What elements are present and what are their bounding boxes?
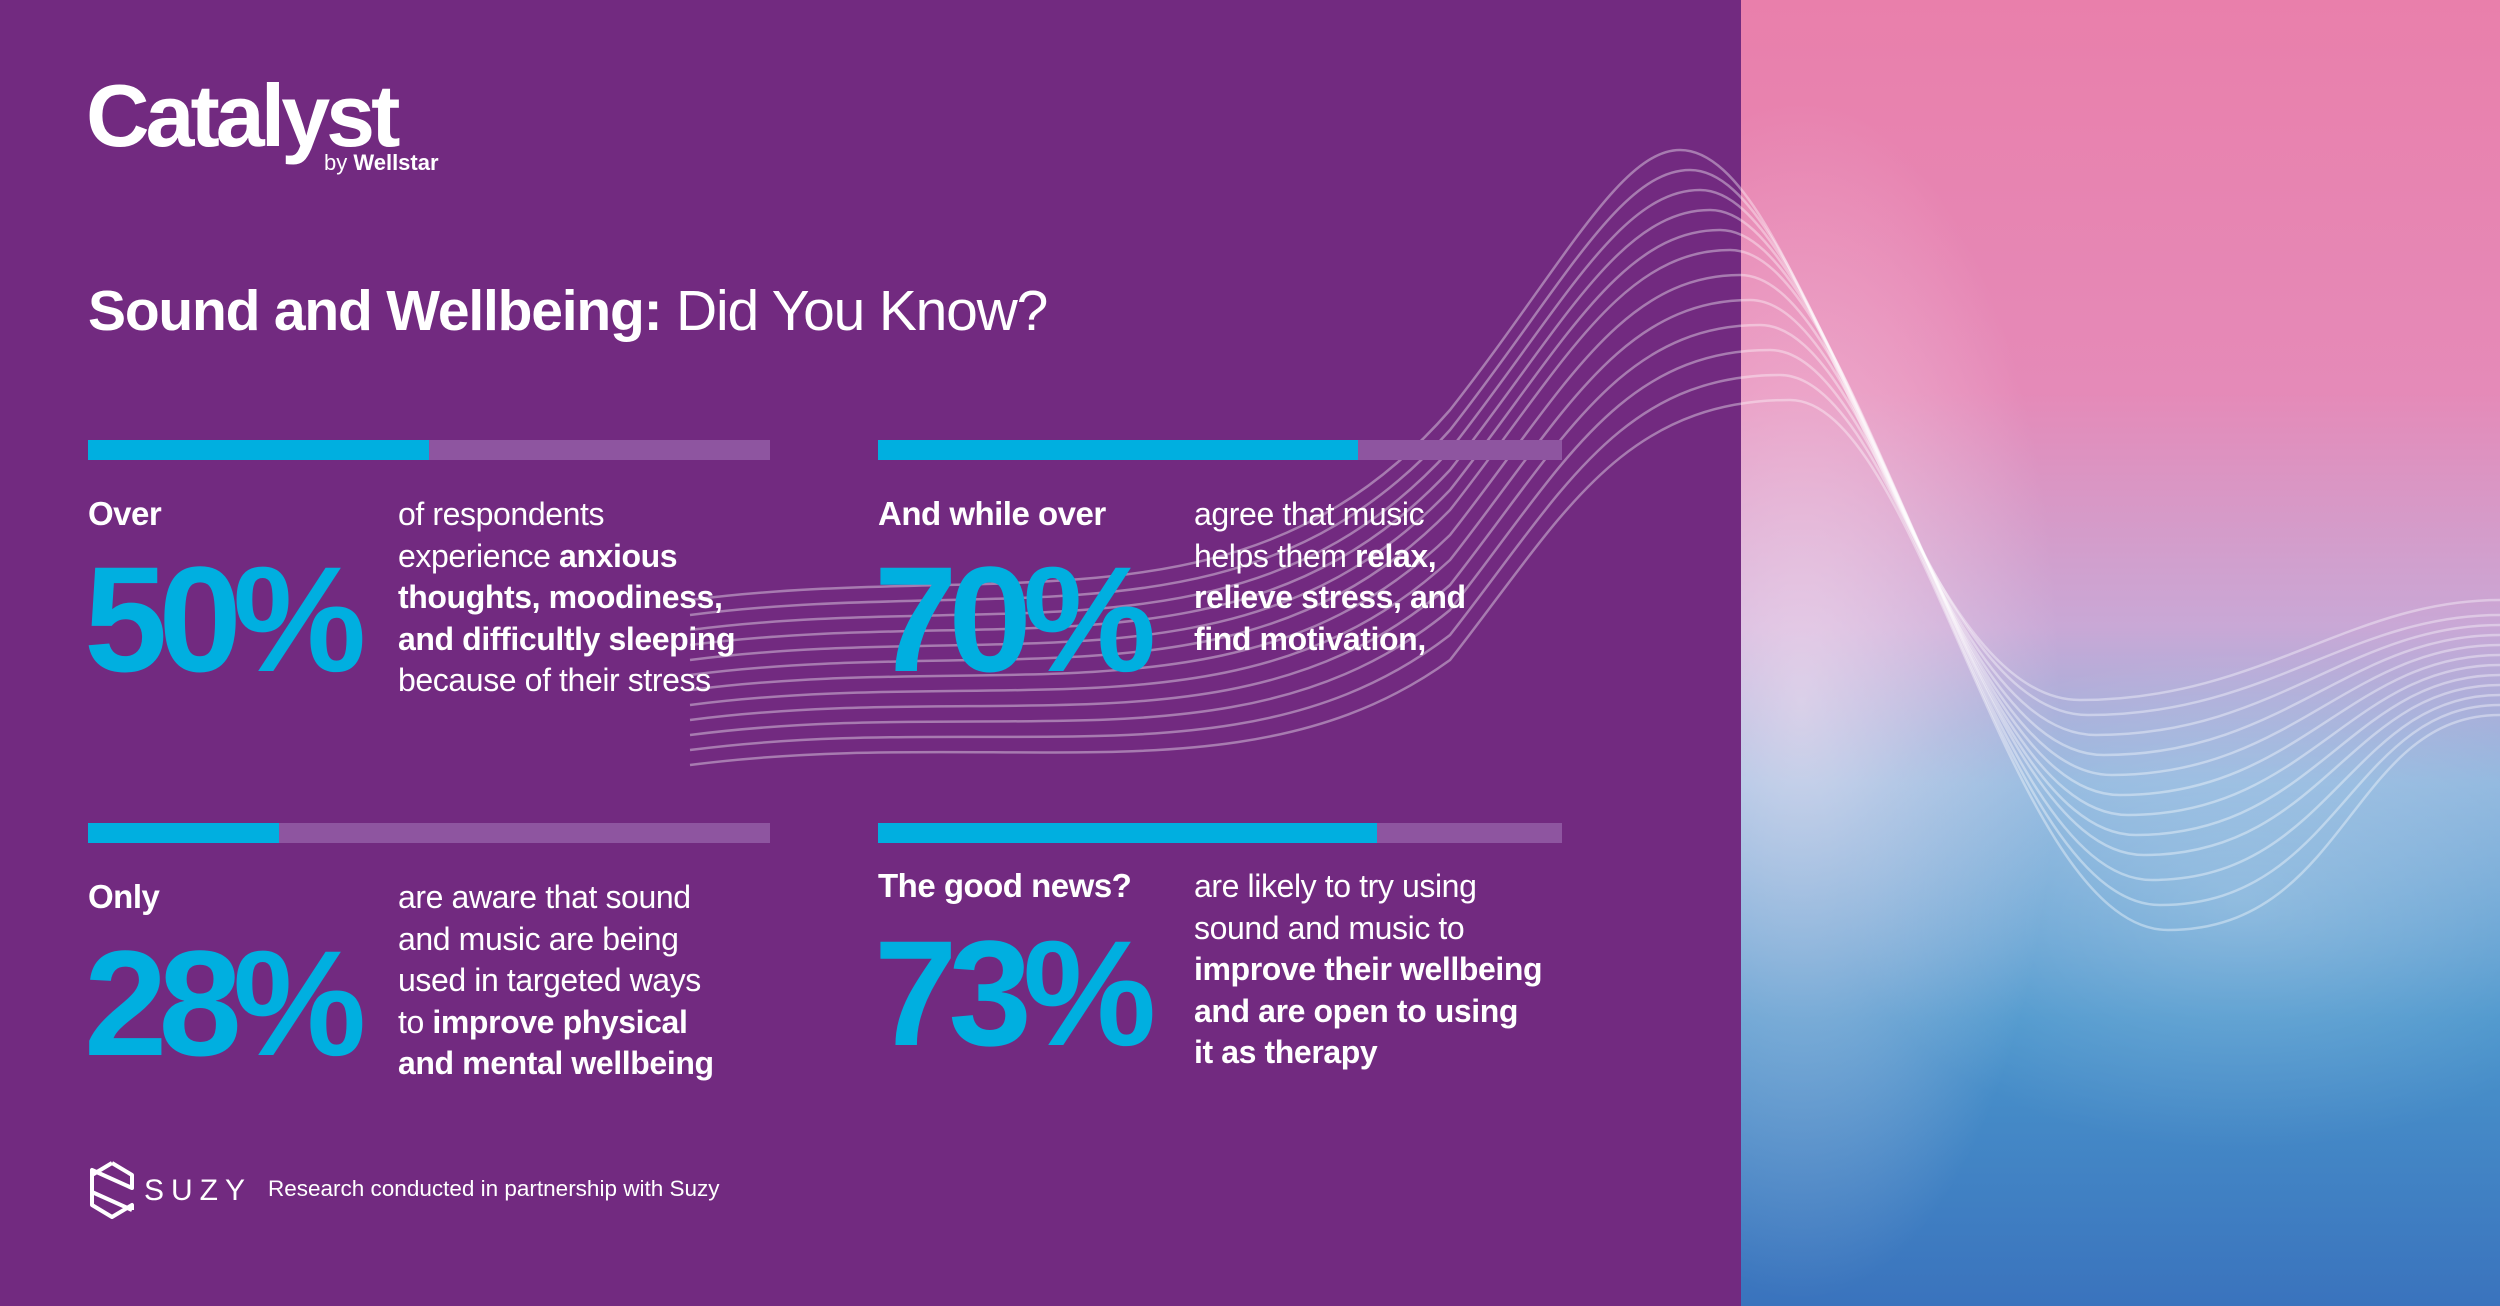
title: Sound and Wellbeing: Did You Know? — [88, 279, 1047, 343]
description: sound and music to — [1194, 910, 1464, 946]
big number: 28% — [84, 919, 357, 1087]
right image panel — [1741, 0, 2500, 1306]
panel: stat 50% — [84, 440, 770, 703]
progress bar 28% — [88, 823, 770, 843]
description: are aware that sound — [398, 879, 691, 915]
label: The good news? — [878, 867, 1131, 904]
label: Over — [88, 495, 161, 532]
progress bar 73% — [878, 823, 1562, 843]
label: Only — [88, 878, 159, 915]
big number: 50% — [84, 535, 357, 703]
description: to improve physical — [398, 1004, 687, 1040]
description — [398, 496, 735, 698]
footer: Suzy partnership — [90, 1161, 720, 1219]
description — [1194, 496, 1466, 656]
description: agree that music — [1194, 496, 1424, 532]
description: are likely to try using — [1194, 868, 1476, 904]
description: improve their wellbeing — [1194, 951, 1542, 987]
description — [398, 879, 714, 1081]
big number: 73% — [874, 909, 1147, 1077]
description: and are open to using — [1194, 992, 1518, 1028]
description: find motivation, — [1194, 620, 1426, 656]
big number: 70% — [874, 535, 1147, 703]
footer text: Research conducted in partnership with Suzy — [268, 1176, 720, 1201]
description: of respondents — [398, 496, 604, 532]
progress bar 70% — [878, 440, 1562, 460]
panel: stat 70% — [874, 440, 1562, 703]
description: because of their stress — [398, 662, 711, 698]
description: thoughts, moodiness, — [398, 579, 722, 615]
description: and music are being — [398, 920, 679, 956]
icon: suzy logo — [90, 1161, 134, 1219]
panel: stat 73% — [874, 823, 1562, 1077]
suzy wordmark: SUZY — [144, 1174, 252, 1207]
panel: stat 28% — [84, 823, 770, 1087]
label: And while over — [878, 495, 1106, 532]
description: and difficultly sleeping — [398, 620, 735, 656]
description: relieve stress, and — [1194, 579, 1466, 615]
description: helps them relax, — [1194, 538, 1436, 574]
description: it as therapy — [1194, 1034, 1377, 1070]
progress bar 50% — [88, 440, 770, 460]
description: and mental wellbeing — [398, 1045, 714, 1081]
logo: Catalyst by Wellstar: by Wellstar — [324, 150, 439, 175]
description: used in targeted ways — [398, 962, 701, 998]
description — [1194, 868, 1542, 1070]
description: experience anxious — [398, 538, 677, 574]
logo: Catalyst by Wellstar: Catalyst — [86, 66, 396, 165]
